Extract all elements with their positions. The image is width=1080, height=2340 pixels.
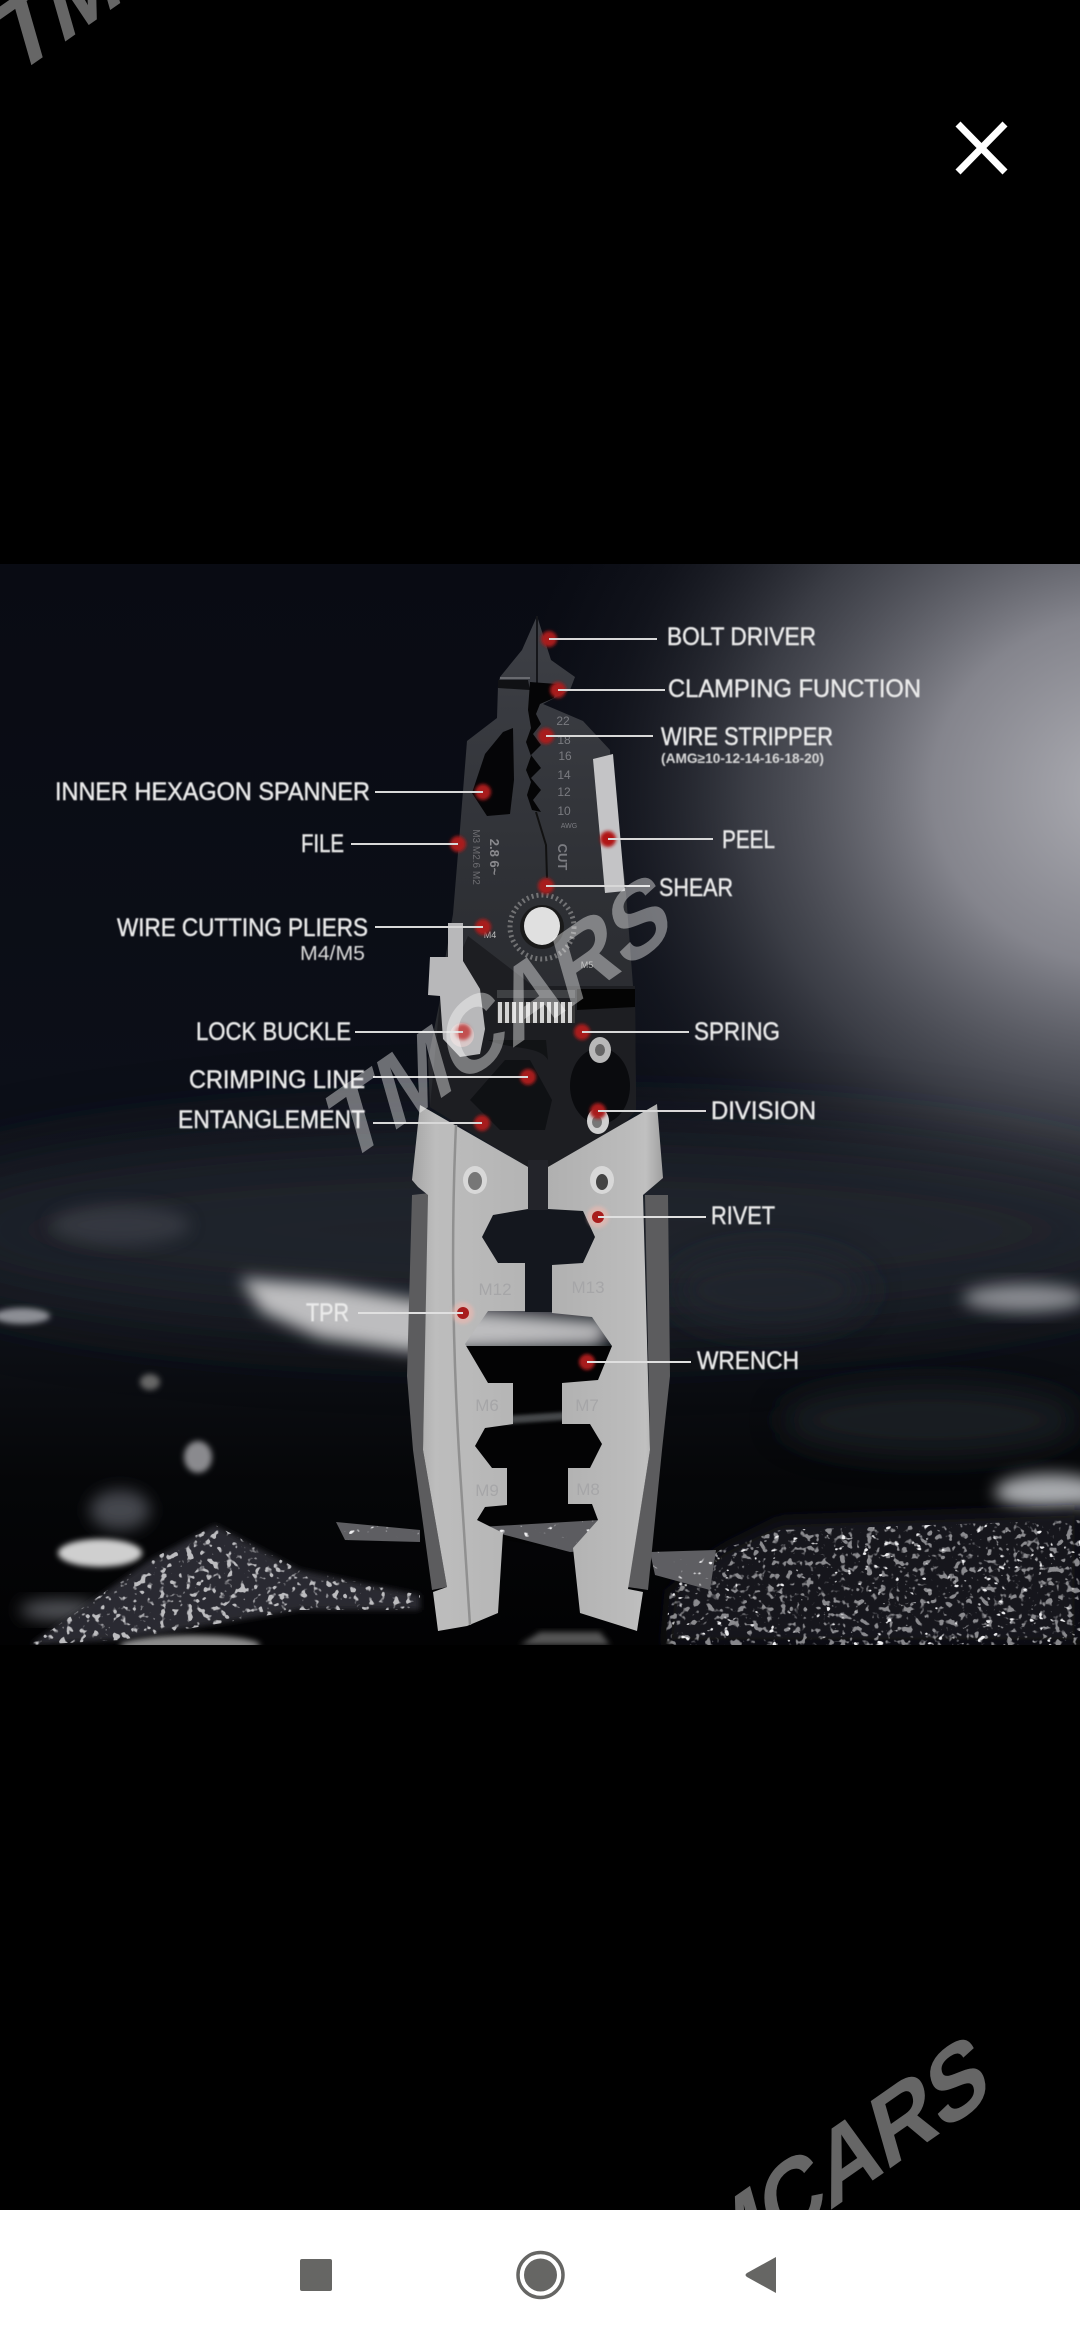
gauge numbers on jaw: M4 xyxy=(484,930,496,940)
gauge numbers on jaw: M3 M2.6 M2 xyxy=(470,829,481,885)
pivot bolt xyxy=(510,895,574,959)
spanner size markings: M12 xyxy=(478,1280,512,1299)
rock: left textured xyxy=(30,1525,420,1645)
callout: CLAMPING FUNCTION: CLAMPING FUNCTION xyxy=(668,675,921,703)
gauge numbers on jaw: 10 xyxy=(557,804,571,818)
gauge numbers on jaw: AWG xyxy=(561,823,577,830)
spanner size markings: M7 xyxy=(575,1396,599,1415)
rivets on jaw xyxy=(587,1037,611,1134)
handle outer strip: left xyxy=(407,1193,447,1590)
gauge numbers on jaw: 14 xyxy=(557,768,571,782)
callout: PEEL xyxy=(600,826,775,854)
callout: CRIMPING LINE: CRIMPING LINE xyxy=(189,1066,365,1094)
callout: SPRING xyxy=(574,1018,780,1046)
handle rivets xyxy=(463,1166,614,1194)
callout: DIVISION xyxy=(590,1097,816,1125)
icon: recents square xyxy=(300,2259,332,2291)
callout: FILE xyxy=(301,830,466,858)
icon: back triangle xyxy=(746,2257,776,2293)
navigation bar xyxy=(0,2210,1080,2340)
icon: close button xyxy=(958,124,1005,172)
gap backing between handles xyxy=(478,1209,600,1312)
lock buckle xyxy=(428,923,485,1057)
spanner size markings: M9 xyxy=(475,1481,499,1500)
callout: SHEAR: SHEAR xyxy=(659,874,733,902)
watermark: bottom right: TMCARS xyxy=(637,2008,999,2340)
callout: ENTANGLEMENT: ENTANGLEMENT xyxy=(178,1106,365,1134)
rock strip behind handles xyxy=(336,1522,420,1542)
callout: RIVET: RIVET xyxy=(711,1202,775,1230)
gauge numbers on jaw: 18 xyxy=(557,733,571,747)
callout: WIRE STRIPPER: WIRE STRIPPER xyxy=(661,723,833,751)
spanner size markings: M8 xyxy=(576,1480,600,1499)
lower jaw dark section xyxy=(430,936,636,1167)
icon: home circle xyxy=(518,2252,563,2298)
rock: right speckled ground xyxy=(665,1510,1080,1645)
callout: SHEAR xyxy=(538,874,733,902)
gauge numbers on jaw: 2.8 6~ xyxy=(487,839,502,876)
spring xyxy=(497,990,575,1023)
handle groove left xyxy=(453,1125,470,1625)
callout: ENTANGLEMENT xyxy=(178,1106,490,1134)
photo background: dark rocks and light glow xyxy=(0,564,1080,1645)
right handle xyxy=(548,1104,663,1631)
callout: CRIMPING LINE xyxy=(189,1066,536,1094)
gauge numbers on jaw: CUT xyxy=(555,844,570,870)
callout: RIVET xyxy=(587,1202,775,1230)
gauge numbers on jaw: 16 xyxy=(558,749,572,763)
upper jaw body xyxy=(428,616,636,1167)
callout: WIRE STRIPPER: (AMG≥10-12-14-16-18-20) xyxy=(661,751,824,766)
crimping holes xyxy=(470,1040,630,1130)
wire stripper serrated slot xyxy=(526,682,557,812)
callout: BOLT DRIVER: BOLT DRIVER xyxy=(667,623,816,651)
watermark: centre: TMCARS xyxy=(319,846,681,1187)
callout: PEEL: PEEL xyxy=(722,826,775,854)
spanner size markings: M6 xyxy=(475,1396,499,1415)
left handle xyxy=(412,1105,528,1631)
callout: TPR xyxy=(306,1299,474,1327)
callout: BOLT DRIVER xyxy=(541,623,816,651)
gauge numbers on jaw: 12 xyxy=(557,785,571,799)
spanner size markings: M13 xyxy=(571,1278,605,1297)
callout: WRENCH xyxy=(579,1347,799,1375)
callout: LOCK BUCKLE: LOCK BUCKLE xyxy=(196,1018,351,1046)
peel blade xyxy=(593,754,625,893)
callout: WIRE CUTTING PLIERS xyxy=(117,914,491,965)
handle outer strip: right xyxy=(628,1195,670,1590)
callout: WRENCH: WRENCH xyxy=(697,1347,799,1375)
callout: WIRE STRIPPER xyxy=(538,723,833,766)
gauge numbers on jaw: 22 xyxy=(556,714,570,728)
callout: INNER HEXAGON SPANNER: INNER HEXAGON SPANNER xyxy=(55,778,370,806)
callout: WIRE CUTTING PLIERS: WIRE CUTTING PLIERS xyxy=(117,914,368,942)
centre split line and jaw notch xyxy=(536,616,538,690)
gauge numbers on jaw: M5 xyxy=(581,960,593,970)
callout: SPRING: SPRING xyxy=(694,1018,780,1046)
callout: LOCK BUCKLE xyxy=(196,1018,471,1046)
callout: WIRE CUTTING PLIERS: M4/M5 xyxy=(300,943,365,965)
inner hexagon spanner opening xyxy=(472,728,514,816)
callout: CLAMPING FUNCTION xyxy=(550,675,921,703)
pliers illustration xyxy=(407,616,670,1631)
callout: FILE: FILE xyxy=(301,830,344,858)
gauge numbers on jaw xyxy=(470,714,593,970)
callout: DIVISION: DIVISION xyxy=(711,1097,816,1125)
callout: TPR: TPR xyxy=(306,1299,349,1327)
spanner size markings xyxy=(475,1278,605,1500)
